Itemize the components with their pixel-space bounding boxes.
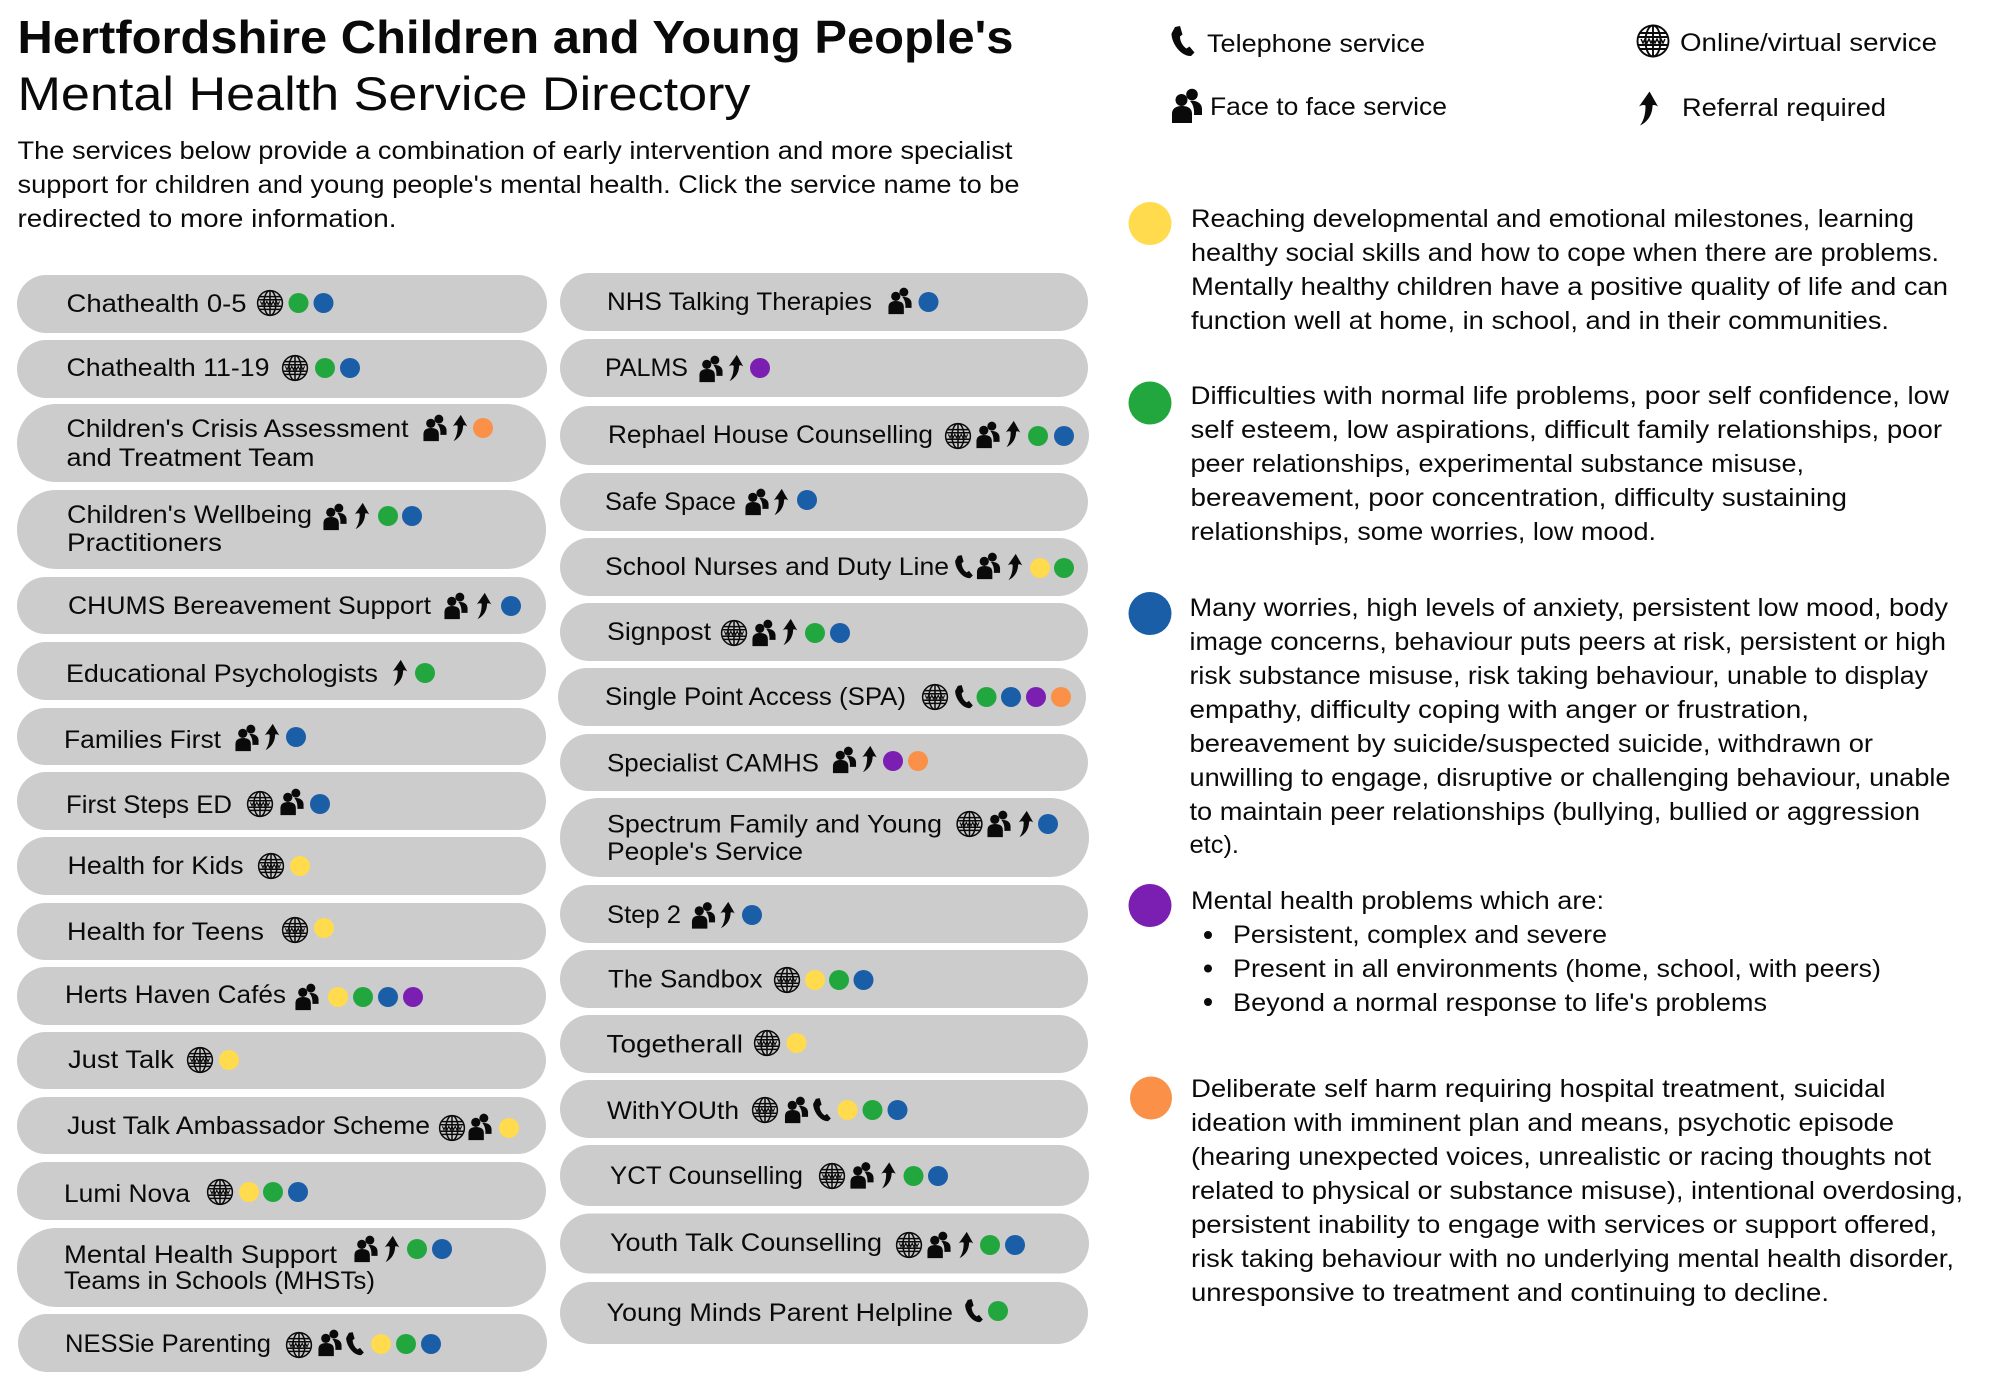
service: Specialist CAMHS: Specialist CAMHS	[607, 750, 819, 778]
key: blue: image concerns, behaviour puts peers at risk, persistent or high	[1190, 628, 1946, 656]
service: Health for Kids	[17, 837, 546, 895]
service: Single Point Access: Single Point Access (SPA)	[605, 683, 906, 711]
legend: face to face	[1172, 89, 1447, 123]
service: Mental Health Support Teams in Schools: Mental Health Support	[64, 1241, 337, 1269]
legend: online: Online/virtual service	[1680, 29, 1937, 57]
service: NHS Talking Therapies: NHS Talking Therapies	[607, 288, 872, 316]
key: green: bereavement, poor concentration, difficulty sustaining	[1190, 484, 1847, 512]
legend: telephone: Telephone service	[1207, 30, 1425, 58]
service: Safe Space	[560, 473, 1088, 531]
service: Health for Teens	[17, 903, 546, 960]
key: purple: Beyond a normal response to life's problems	[1233, 989, 1767, 1017]
service: Chathealth 0-5	[17, 275, 547, 333]
key: blue: to maintain peer relationships (bullying, bullied or aggression	[1190, 798, 1920, 826]
service: The Sandbox: The Sandbox	[608, 966, 763, 994]
service: CHUMS Bereavement Support: CHUMS Bereavement Support	[68, 592, 431, 620]
service: Children's Crisis Assessment and Treatment Team	[17, 404, 546, 482]
service: Rephael House Counselling: Rephael House Counselling	[608, 421, 933, 449]
legend: face to face: Face to face service	[1210, 93, 1447, 121]
service: Children's Wellbeing Practitioners	[17, 490, 546, 569]
service: Chathealth 0-5: Chathealth 0-5	[66, 290, 246, 318]
service: Children's Wellbeing Practitioners: Children's Wellbeing	[67, 501, 312, 529]
service: School Nurses and Duty Line: School Nurses and Duty Line	[605, 553, 949, 581]
service: YCT Counselling: YCT Counselling	[610, 1162, 803, 1190]
colour key	[1128, 202, 1963, 1307]
title line 1: Hertfordshire Children and Young People's	[18, 11, 1013, 63]
service: YCT Counselling	[560, 1145, 1089, 1206]
key: yellow: function well at home, in school, and in their communities.	[1191, 307, 1889, 335]
key: purple	[1128, 884, 1881, 1017]
service: Lumi Nova	[17, 1162, 546, 1220]
key: orange: Deliberate self harm requiring hospital treatment, suicidal	[1191, 1075, 1886, 1103]
key: orange: risk taking behaviour with no underlying mental health disorder,	[1191, 1245, 1954, 1273]
service: Rephael House Counselling	[560, 406, 1089, 465]
service: Families First	[17, 708, 546, 765]
key: purple: Persistent, complex and severe	[1233, 921, 1607, 949]
service: Spectrum Family and Young People's Service: Spectrum Family and Young	[607, 810, 942, 838]
key: blue: etc).	[1190, 831, 1239, 859]
service: WithYOUth: WithYOUth	[607, 1097, 739, 1125]
service: Children's Wellbeing Practitioners: Practitioners	[67, 529, 222, 557]
legend: referral	[1639, 92, 1886, 126]
service: Specialist CAMHS	[560, 734, 1088, 791]
title	[18, 11, 1013, 120]
service: Educational Psychologists: Educational Psychologists	[66, 660, 378, 688]
service: Chathealth 11-19	[17, 340, 547, 398]
key: blue: Many worries, high levels of anxiety, persistent low mood, body	[1190, 594, 1949, 622]
service: NESSie Parenting	[18, 1314, 547, 1372]
service: NHS Talking Therapies	[560, 273, 1088, 331]
service: Lumi Nova: Lumi Nova	[64, 1180, 190, 1208]
service: PALMS	[560, 339, 1088, 397]
intro text: support for children and young people's mental health. Click the service name to be	[18, 171, 1019, 199]
intro text: redirected to more information.	[18, 205, 396, 233]
service: Young Minds Parent Helpline: Young Minds Parent Helpline	[606, 1299, 953, 1327]
key: purple: Mental health problems which are:	[1191, 887, 1604, 915]
key: yellow	[1128, 202, 1948, 335]
service: Just Talk Ambassador Scheme: Just Talk Ambassador Scheme	[67, 1112, 430, 1140]
service: Children's Crisis Assessment and Treatment Team: Children's Crisis Assessment	[66, 415, 409, 443]
service: Herts Haven Cafes	[17, 967, 546, 1025]
service: Young Minds Parent Helpline	[560, 1282, 1088, 1344]
service: Togetherall: Togetherall	[606, 1030, 743, 1058]
key: green: self esteem, low aspirations, difficult family relationships, poor	[1190, 416, 1942, 444]
legend: telephone	[1172, 26, 1425, 58]
service: School Nurses and Duty Line	[560, 538, 1088, 596]
key: green: Difficulties with normal life problems, poor self confidence, low	[1190, 382, 1950, 410]
service: Just Talk Ambassador Scheme	[17, 1097, 546, 1154]
service: Chathealth 11-19: Chathealth 11-19	[66, 354, 270, 382]
service: Togetherall	[560, 1015, 1088, 1073]
service: Youth Talk Counselling: Youth Talk Counselling	[610, 1229, 882, 1257]
service: Just Talk	[17, 1032, 546, 1089]
key: blue	[1128, 592, 1950, 859]
key: blue: bereavement by suicide/suspected suicide, withdrawn or	[1190, 730, 1873, 758]
services column 2	[558, 273, 1089, 1344]
key: purple: Present in all environments (home, school, with peers)	[1233, 955, 1881, 983]
service: CHUMS Bereavement Support	[17, 577, 546, 634]
service: First Steps ED: First Steps ED	[66, 791, 232, 819]
intro text	[18, 137, 1019, 233]
title line 2: Mental Health Service Directory	[18, 67, 751, 120]
service: PALMS: PALMS	[605, 354, 688, 382]
service: Safe Space: Safe Space	[605, 488, 736, 516]
service: Signpost	[560, 603, 1088, 661]
service: NESSie Parenting: NESSie Parenting	[65, 1330, 271, 1358]
service: First Steps ED	[17, 772, 546, 830]
service: Health for Kids: Health for Kids	[68, 852, 244, 880]
key: blue: risk substance misuse, risk taking behaviour, unable to display	[1190, 662, 1929, 690]
service: Mental Health Support Teams in Schools: Teams in Schools (MHSTs)	[64, 1267, 375, 1295]
intro text: The services below provide a combination of early intervention and more specialist	[18, 137, 1013, 165]
service: Health for Teens: Health for Teens	[67, 918, 264, 946]
key: green: peer relationships, experimental substance misuse,	[1190, 450, 1804, 478]
key: blue: empathy, difficulty coping with anger or frustration,	[1190, 696, 1809, 724]
key: green	[1128, 382, 1950, 546]
service: Families First: Families First	[64, 726, 221, 754]
icon legend	[1172, 26, 1937, 126]
service: The Sandbox	[560, 950, 1088, 1008]
key: green: relationships, some worries, low mood.	[1190, 518, 1656, 546]
service: Herts Haven Cafes: Herts Haven Cafés	[65, 981, 286, 1009]
service: Step 2: Step 2	[607, 901, 681, 929]
key: orange: related to physical or substance misuse), intentional overdosing,	[1191, 1177, 1963, 1205]
key: orange: ideation with imminent plan and means, psychotic episode	[1191, 1109, 1894, 1137]
key: orange	[1130, 1075, 1963, 1307]
key: orange: (hearing unexpected voices, unrealistic or racing thoughts not	[1191, 1143, 1931, 1171]
services column 1	[17, 275, 547, 1372]
service: Youth Talk Counselling	[560, 1214, 1089, 1274]
service: Step 2	[560, 885, 1088, 943]
key: orange: unresponsive to treatment and continuing to decline.	[1191, 1279, 1829, 1307]
legend: online	[1638, 26, 1937, 57]
service: Signpost: Signpost	[607, 618, 711, 646]
key: yellow: Reaching developmental and emotional milestones, learning	[1191, 205, 1914, 233]
key: blue: unwilling to engage, disruptive or challenging behaviour, unable	[1190, 764, 1950, 792]
legend: referral: Referral required	[1682, 94, 1886, 122]
service: Spectrum Family and Young People's Service: People's Service	[607, 838, 803, 866]
service: Spectrum Family and Young People's Service	[560, 798, 1089, 877]
key: yellow: Mentally healthy children have a positive quality of life and can	[1191, 273, 1948, 301]
service: Educational Psychologists	[17, 642, 546, 700]
service: Just Talk: Just Talk	[68, 1046, 175, 1074]
service: Mental Health Support Teams in Schools	[17, 1228, 546, 1307]
service: Single Point Access	[558, 668, 1086, 726]
service: Children's Crisis Assessment and Treatment Team: and Treatment Team	[66, 444, 314, 472]
service: WithYOUth	[560, 1080, 1088, 1138]
key: orange: persistent inability to engage with services or support offered,	[1191, 1211, 1937, 1239]
key: yellow: healthy social skills and how to cope when there are problems.	[1191, 239, 1939, 267]
